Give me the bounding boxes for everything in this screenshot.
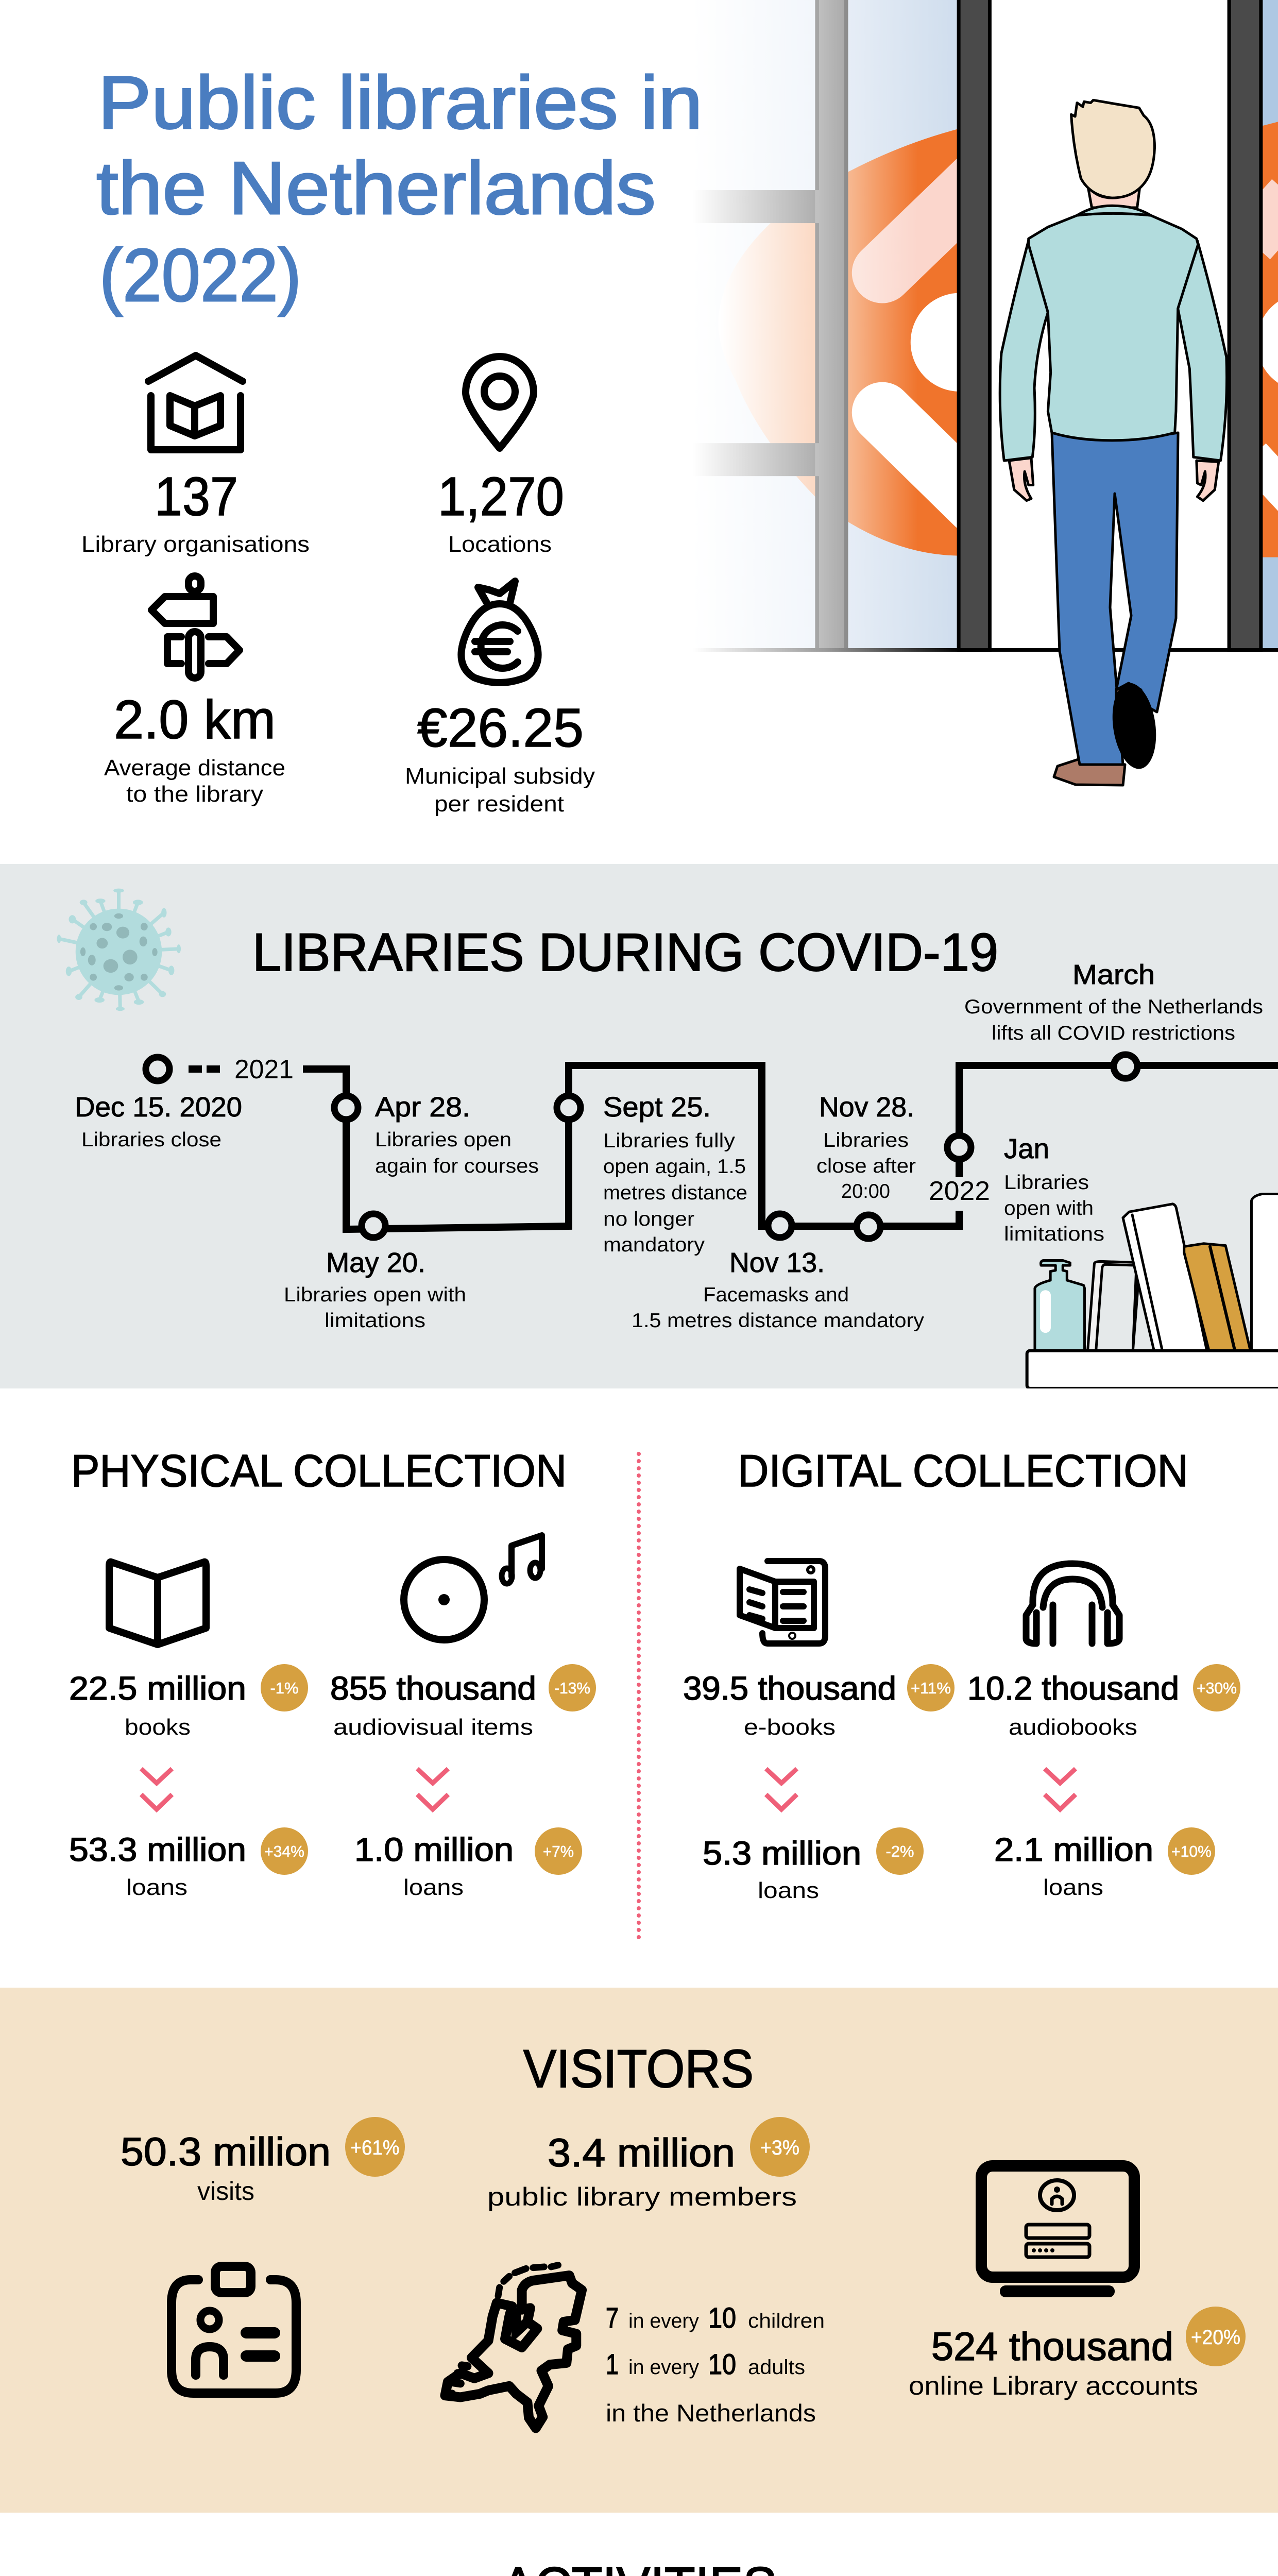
illustration: library entrance with man walking in [693,0,1278,785]
stat: audiovisual loans [354,1827,582,1900]
icon: map of the Netherlands [445,2265,582,2428]
event: Sept 25: metres distance [603,1182,747,1204]
event: Dec 15 2020: Dec 15. 2020 [75,1092,242,1123]
event: Jan 2022 [1004,1133,1104,1245]
event: Nov 28: close after [816,1155,916,1177]
event: Sept 25: open again, 1.5 [603,1156,746,1178]
title: the Netherlands [96,146,656,230]
stat: audiobook loans: +10% [1171,1842,1212,1860]
event: Jan 2022: open with [1004,1197,1094,1219]
stat: books: 22.5 million [69,1670,246,1707]
event: Jan 2022: Libraries [1004,1172,1089,1194]
icon: library house [148,355,243,450]
stat: books [69,1664,308,1740]
stat: library organisations: Library organisations [81,532,310,557]
stat: library organisations [81,466,310,557]
stat: audiobook loans: 2.1 million [994,1831,1153,1868]
event: May 20: limitations [325,1310,425,1332]
event: Nov 28: Libraries [823,1129,909,1151]
timeline nodes [146,1055,1137,1239]
icon: library card [172,2266,296,2393]
event: Apr 28: Apr 28. [375,1092,470,1123]
stat: online accounts [909,2307,1246,2400]
stat: visits [121,2117,405,2206]
event: Jan 2022: Jan [1004,1133,1049,1164]
title: Public libraries in [98,61,703,144]
event: Nov 13: Nov 13. [729,1247,825,1278]
stat: e-books: +11% [911,1679,951,1697]
stat: e-book loans: loans [758,1878,819,1903]
stat: book loans: +34% [264,1842,304,1860]
event: Jan 2022: limitations [1004,1223,1104,1245]
text: membership share: 7 [606,2301,619,2334]
stat: book loans: 53.3 million [69,1831,246,1868]
panel: collections [0,1388,1278,1988]
text: membership share [606,2301,825,2427]
event: Dec 15 2020 [75,1092,242,1151]
title [96,61,703,317]
stat: members: public library members [487,2182,797,2211]
stat: e-books: e-books [744,1715,836,1740]
event: Nov 13: 1.5 metres distance mandatory [632,1310,925,1332]
stat: municipal subsidy: per resident [434,791,564,817]
stat: locations: 1,270 [438,466,564,527]
stat: online accounts: online Library accounts [909,2371,1198,2400]
stat: e-books: 39.5 thousand [683,1670,896,1707]
text: membership share: in every [628,2356,699,2379]
event: May 20 [284,1247,466,1332]
illustration: shelf with sanitiser and books [1027,1194,1278,1388]
stat: book loans [69,1827,308,1900]
event: Nov 13 [632,1247,925,1332]
event: Sept 25: Sept 25. [603,1092,711,1123]
stat: online accounts: +20% [1191,2326,1240,2349]
stat: audiovisual loans: loans [403,1875,464,1900]
stat: members: 3.4 million [548,2131,735,2175]
stat: members [487,2117,810,2211]
event: March [964,959,1263,1044]
stat: locations: Locations [448,532,552,557]
stat: book loans: loans [126,1875,188,1900]
event: May 20: May 20. [326,1247,425,1278]
icon: e-book [740,1561,825,1643]
stat: audiobook loans [994,1827,1215,1900]
event: Dec 15 2020: Libraries close [81,1129,221,1151]
stat: municipal subsidy: Municipal subsidy [405,764,595,789]
text: membership share: 10 [708,2348,736,2380]
event: Sept 25: no longer [603,1208,694,1230]
event: Apr 28 [375,1092,539,1177]
icon: virus [57,889,181,1011]
stat: audiovisual items [330,1664,596,1740]
stat: e-book loans: -2% [886,1842,914,1860]
stat: e-book loans [703,1827,924,1903]
stat: average distance: 2.0 km [114,689,276,750]
event: March: lifts all COVID restrictions [992,1022,1235,1044]
heading: LIBRARIES DURING COVID-19 [252,923,998,982]
stat: audiovisual items: audiovisual items [333,1715,533,1740]
event: Nov 28 [816,1092,916,1202]
stat: audiovisual loans: 1.0 million [354,1831,514,1868]
event: Nov 28: Nov 28. [819,1092,914,1123]
stat: books: books [125,1715,191,1740]
stat: e-books [683,1664,955,1740]
timeline label: 2021: 2021 [234,1055,294,1084]
text: membership share: 10 [708,2301,736,2334]
icon: cd and music notes [404,1535,542,1640]
stat: library organisations: 137 [155,466,238,527]
heading: digital collection: DIGITAL COLLECTION [738,1445,1188,1496]
heading: VISITORS [523,2039,754,2099]
stat: audiovisual loans: +7% [543,1842,574,1860]
stat: visits: +61% [350,2137,400,2159]
icon: monitor with login [981,2166,1134,2297]
stat: online accounts: 524 thousand [931,2325,1173,2369]
stat: visits: 50.3 million [121,2130,331,2174]
stat: average distance: Average distance [104,755,285,781]
stat: audiobooks [967,1664,1240,1740]
icon: headphones [1026,1564,1119,1643]
text: membership share: in every [628,2310,699,2332]
panel: visitors [0,1988,1278,2513]
event: May 20: Libraries open with [284,1284,466,1306]
heading: physical collection: PHYSICAL COLLECTION [71,1445,567,1496]
stat: books: -1% [270,1679,299,1697]
stat: audiobooks: 10.2 thousand [967,1670,1179,1707]
panel: libraries during covid-19 [0,864,1278,1388]
event: Sept 25 [603,1092,747,1256]
stat: audiovisual items: 855 thousand [330,1670,536,1707]
stat: e-book loans: 5.3 million [703,1835,861,1872]
stat: average distance [104,689,285,807]
text: membership share: in the Netherlands [606,2399,816,2427]
timeline label: 2022: 2022 [929,1176,990,1206]
event: Nov 28: 20:00 [841,1180,890,1202]
stat: audiovisual items: -13% [554,1679,590,1697]
title: (2022) [99,233,301,317]
text: membership share: 1 [606,2348,619,2380]
icon: book [109,1562,206,1645]
text: membership share: children [748,2310,825,2332]
event: Sept 25: mandatory [603,1234,705,1256]
event: Apr 28: Libraries open [375,1129,512,1151]
icon: location pin [466,357,534,448]
event: Apr 28: again for courses [375,1155,539,1177]
arrows: pink chevrons [141,1769,1076,1809]
stat: visits: visits [197,2177,254,2206]
event: March: Government of the Netherlands [964,996,1263,1018]
event: Nov 13: Facemasks and [703,1284,849,1306]
stat: audiobooks: audiobooks [1009,1715,1137,1740]
stat: audiobook loans: loans [1043,1875,1103,1900]
text: membership share: adults [748,2356,805,2379]
stat: average distance: to the library [126,782,263,807]
stat: municipal subsidy: €26.25 [417,698,584,758]
timeline line [189,1065,1278,1229]
icon: signpost [151,576,240,678]
stat: audiobooks: +30% [1197,1679,1237,1697]
panel: header [83,0,1278,816]
icon: money bag [461,581,538,683]
stat: municipal subsidy [405,698,595,817]
stat: locations [438,466,564,557]
stat: members: +3% [760,2137,799,2159]
event: Sept 25: Libraries fully [603,1130,736,1152]
event: March: March [1072,959,1155,990]
